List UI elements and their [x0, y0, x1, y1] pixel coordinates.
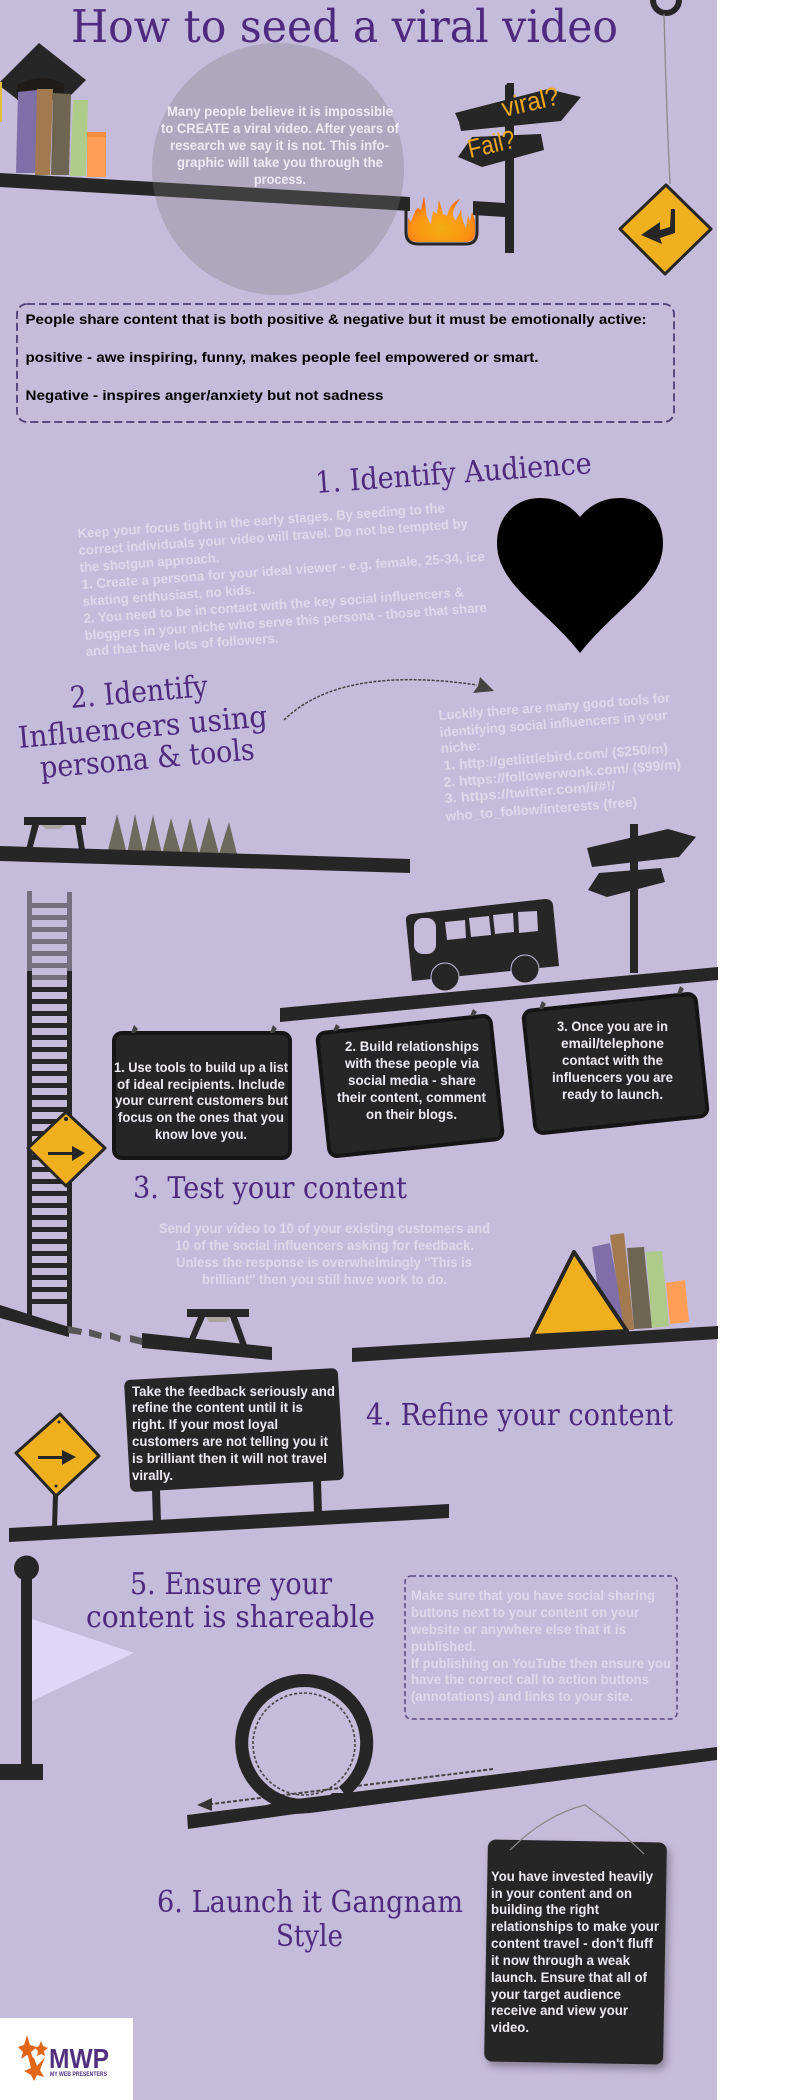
text block: test: [159, 1221, 490, 1287]
board 1: your current customers but: [115, 1093, 288, 1108]
intro text: to CREATE a viral video. After years of: [161, 121, 399, 136]
board 6 with hanging string: launch. Ensure that all of: [491, 1970, 647, 1985]
board 1: focus on the ones that you: [118, 1110, 284, 1125]
board 6 with hanging string: video.: [491, 2020, 529, 2035]
board 3: influencers you are: [552, 1070, 673, 1085]
board 3: ready to launch.: [562, 1087, 663, 1102]
board 6 with hanging string: relationships to make your: [491, 1919, 660, 1934]
icon: graduation cap and books: [0, 43, 106, 177]
title: How to seed a viral video: [71, 0, 618, 53]
board 4 on posts: refine the content until it is: [132, 1400, 303, 1415]
text block: audience: correct individuals your video will travel. Do not be tempted by: [78, 516, 469, 558]
board 2: [317, 1009, 503, 1157]
dashed box: shareable: website or anywhere else that it is: [410, 1622, 626, 1637]
heading: 2. Identify Influencers: 2. Identify: [69, 669, 209, 716]
board 1: [114, 1025, 290, 1158]
text block: test: Send your video to 10 of your existing customers and: [159, 1221, 490, 1236]
board 6 with hanging string: [484, 1805, 667, 2065]
heading: 2. Identify Influencers: Influencers using: [17, 699, 269, 756]
dashed box: shareable: buttons next to your content on your: [411, 1605, 640, 1620]
bar under cone: [352, 1326, 718, 1362]
text block: test: Unless the response is overwhelmingly "This is: [176, 1255, 472, 1270]
intro text: Many people believe it is impossible: [167, 104, 393, 119]
text block: audience: skating enthusiast, no kids.: [82, 582, 256, 609]
board 6 with hanging string: it now through a weak: [491, 1953, 630, 1968]
text block: audience: 2. You need to be in contact with the key social influencers &: [83, 584, 465, 626]
intro text: [161, 104, 399, 187]
arrow: curved dashed: [284, 677, 494, 720]
logo: MWP: MY WEB PRESENTERS: [50, 2072, 107, 2078]
dashed statement box: positive - awe inspiring, funny, makes people feel empowered or smart.: [26, 349, 538, 365]
heading: 3. Test your content: 3. Test your content: [133, 1171, 407, 1206]
board 6 with hanging string: building the right: [491, 1902, 599, 1917]
board 2: social media - share: [348, 1073, 476, 1088]
board 1: know love you.: [155, 1127, 247, 1142]
text block: audience: the shotgun approach.: [79, 550, 220, 575]
board 2: with these people via: [344, 1056, 479, 1071]
icon: bench and spikes on bar: [0, 814, 410, 873]
board 3: contact with the: [562, 1053, 663, 1068]
text block: audience: and that have lots of followers.: [85, 631, 279, 659]
heading: 6. Launch it Gangnam Style: [157, 1885, 463, 1954]
text block: tools: 1. http://getlittlebird.com/ ($250/m): [443, 741, 669, 773]
board 6 with hanging string: in your content and on: [491, 1886, 632, 1901]
dashed box: shareable: If publishing on YouTube then ensure you: [411, 1656, 671, 1671]
intro text: process.: [254, 172, 306, 187]
icon: flag: [0, 1556, 134, 1780]
icon: hanging hook and string: [653, 0, 679, 184]
icon: ladder: [27, 891, 72, 1330]
board 1: 1. Use tools to build up a list: [114, 1060, 288, 1075]
heading: 6. Launch it Gangnam Style: 6. Launch it Gangnam: [157, 1885, 463, 1920]
icon: ladder warning sign: [28, 1112, 105, 1186]
logo: MWP: [0, 2018, 133, 2100]
signpost: viral or fail: [455, 81, 581, 253]
signpost: viral or fail: Fail?: [465, 124, 518, 164]
signpost: viral or fail: viral?: [499, 81, 562, 123]
text block: audience: [77, 500, 488, 659]
board 1: of ideal recipients. Include: [117, 1077, 285, 1092]
dashed statement box: Negative - inspires anger/anxiety but not sadness: [26, 387, 384, 403]
dashed statement box: [17, 304, 674, 422]
icon: heart: [497, 498, 663, 653]
heading: 2. Identify Influencers: [17, 669, 269, 786]
icon: loop ramp: [187, 1681, 717, 1829]
bar under bus: [280, 967, 718, 1022]
icon: cone: [532, 1252, 627, 1336]
icon: bus: [406, 899, 559, 991]
text block: audience: 1. Create a persona for your ideal viewer - e.g. female, 25-34, ice: [81, 549, 486, 592]
board 6 with hanging string: your target audience: [491, 1987, 621, 2002]
text block: tools: Luckily there are many good tools for: [438, 690, 671, 723]
shelf bar: [0, 173, 410, 211]
heading: 4. Refine your content: 4. Refine your content: [366, 1398, 673, 1433]
board 3: 3. Once you are in: [557, 1019, 668, 1034]
text block: tools: who_to_follow/interests (free): [444, 794, 638, 824]
text block: tools: 3. https://twitter.com/i/#!/: [444, 778, 616, 806]
icon: bench 2: [187, 1309, 249, 1345]
board 2: on their blogs.: [366, 1107, 457, 1122]
intro text: research we say it is not. This info-: [170, 138, 389, 153]
text block: tools: [438, 690, 682, 824]
board 6 with hanging string: content travel - don't fluff: [491, 1936, 653, 1951]
intro circle: [152, 43, 404, 295]
logo: MWP: MWP: [49, 2043, 109, 2074]
broken bar with dashes: [0, 1305, 272, 1360]
text block: tools: niche:: [440, 738, 481, 756]
heading: 5. Ensure your content is shareable: content is shareable: [86, 1600, 375, 1635]
heading: 1. Identify Audience: 1. Identify Audience: [314, 446, 593, 501]
signpost: right: [587, 824, 696, 973]
heading: 5. Ensure your content is shareable: 5. Ensure your: [130, 1567, 333, 1602]
bar 4: [9, 1504, 449, 1542]
dashed statement box: People share content that is both positive & negative but it must be emotionally active:: [26, 311, 646, 327]
heading: 6. Launch it Gangnam Style: Style: [276, 1919, 343, 1954]
text block: audience: bloggers in your niche who serve this persona - those that share: [84, 600, 488, 643]
dashed box: shareable: [405, 1576, 677, 1719]
heading: 2. Identify Influencers: persona & tools: [39, 732, 256, 786]
board 4 on posts: right. If your most loyal: [132, 1417, 278, 1432]
bar beside fire: [473, 201, 505, 217]
text block: test: brilliant" then you still have work to do.: [202, 1272, 447, 1287]
board 6 with hanging string: You have invested heavily: [491, 1869, 653, 1884]
board 2: 2. Build relationships: [345, 1039, 479, 1054]
board 4 on posts: virally.: [132, 1468, 173, 1483]
intro text: graphic will take you through the: [177, 155, 383, 170]
text block: tools: identifying social influencers in your: [439, 707, 668, 740]
board 4 on posts: customers are not telling you it: [132, 1434, 328, 1449]
text block: tools: 2. https://followerwonk.com/ ($99/m): [443, 757, 682, 790]
text block: audience: Keep your focus tight in the early stages. By seeding to the: [77, 500, 446, 541]
dashed box: shareable: (annotations) and links to your site.: [411, 1689, 633, 1704]
board 3: [523, 986, 708, 1134]
icon: road sign 4: [16, 1414, 99, 1528]
board 6 with hanging string: receive and view your: [491, 2003, 629, 2018]
board 3: email/telephone: [561, 1036, 664, 1051]
dashed box: shareable: have the correct call to action buttons: [411, 1672, 649, 1687]
text block: test: 10 of the social influencers asking for feedback.: [175, 1238, 474, 1253]
heading: 5. Ensure your content is shareable: [86, 1567, 375, 1635]
dashed box: shareable: published.: [411, 1639, 476, 1654]
icon: books behind cone: [592, 1233, 689, 1332]
board 4 on posts: Take the feedback seriously and: [132, 1384, 335, 1399]
board 4 on posts: [124, 1368, 344, 1522]
board 2: their content, comment: [337, 1090, 487, 1105]
icon: fire pot: [406, 196, 477, 244]
dashed box: shareable: Make sure that you have social sharing: [411, 1588, 655, 1603]
icon: warning diamond with turn arrow: [620, 185, 711, 274]
board 4 on posts: is brilliant then it will not travel: [132, 1451, 327, 1466]
